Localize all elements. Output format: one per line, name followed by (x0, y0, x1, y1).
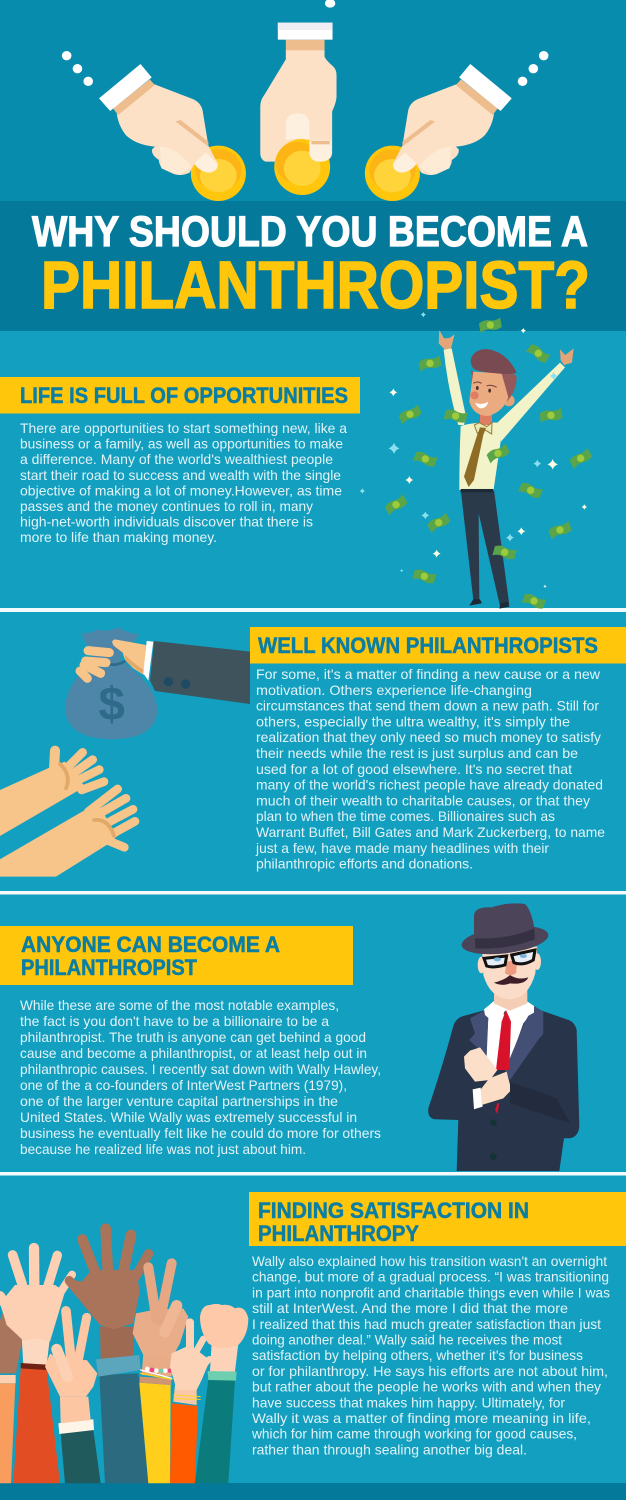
heading bar (0, 926, 353, 985)
heading bar (249, 1192, 626, 1246)
panel: well known philanthropists (0, 627, 626, 877)
blue sleeve arm with dark hand (65, 1229, 149, 1483)
text block: many of the world's richest people have already donated (256, 778, 603, 793)
text block: Warrant Buffet, Bill Gates and Mark Zuckerberg, to name (256, 825, 605, 840)
text block: circumstances that send them down a new path. Still for (256, 699, 599, 714)
giving hand (80, 639, 190, 689)
heading bar (250, 627, 626, 664)
panel: life is full of opportunities (0, 312, 593, 610)
text block: cause and become a philanthropist, or at least help out in (20, 1046, 367, 1061)
text block: doing another deal.” Wally said he receives the most (252, 1332, 562, 1348)
money bag: $ (98, 678, 125, 731)
orange sleeve arm with small peace hand (170, 1322, 210, 1483)
text block: just a few, have made many headlines with their (255, 841, 549, 856)
text block: high-net-worth individuals discover that there is (20, 515, 313, 530)
heading bar: WELL KNOWN PHILANTHROPISTS (258, 633, 598, 658)
heading bar: ANYONE CAN BECOME A (21, 932, 280, 957)
text block: more to life than making money. (20, 530, 217, 545)
text block: or for philanthropy. He says his efforts are not about him, (252, 1364, 608, 1379)
text block: because he realized life was not just about him. (20, 1142, 306, 1157)
text block: change, but more of a gradual process. “I was transitioning (252, 1270, 609, 1285)
hat (460, 903, 550, 959)
text block: philanthropic efforts and donations. (256, 857, 473, 872)
sparkles (360, 312, 587, 588)
far left arm (0, 1290, 22, 1483)
text block (255, 667, 605, 872)
text block: United States. While Wally was extremely successful in (20, 1110, 357, 1125)
text block (20, 998, 381, 1157)
illustration: hands dropping coins (62, 0, 549, 201)
text block: one of the larger venture capital partnerships in the (20, 1094, 338, 1109)
text block: their needs while the rest is just surplus and can be (256, 746, 578, 761)
text block: still at InterWest. And the more I did that the more (252, 1301, 568, 1316)
red sleeve arm with open hand (0, 1248, 72, 1483)
text block: which for him came through working for good causes, (251, 1427, 577, 1442)
heading bar (0, 377, 360, 414)
text block: much of their wealth to charitable causes, or that they (256, 793, 590, 808)
text block (20, 421, 347, 545)
text block: one of the a co-founders of InterWest Partners (1979), (20, 1078, 347, 1093)
illustration: man with hat and glasses (428, 903, 579, 1171)
text block: plan to when the time comes. Billionaires such as (256, 809, 555, 824)
right hand and coin (365, 64, 512, 201)
text block: Wally it was a matter of finding more meaning in life, (252, 1411, 591, 1426)
falling bills (384, 318, 593, 610)
buttons (490, 1119, 497, 1160)
panel: anyone can become a philanthropist (0, 903, 579, 1171)
text block: objective of making a lot of money.However, as time (20, 483, 342, 498)
heading bar: LIFE IS FULL OF OPPORTUNITIES (20, 383, 348, 408)
upper reaching hand (0, 751, 104, 836)
illustration: raised hands (0, 1229, 248, 1483)
text block: business or a family, as well as opportunities to make (20, 437, 343, 452)
text block: in part into nonprofit and charitable things even while I was (252, 1285, 610, 1300)
lower reaching hand (0, 789, 135, 877)
bills over man (444, 372, 558, 561)
text block: realization that they only need so much money to satisfy (256, 730, 601, 745)
illustration: man with money rain (360, 312, 593, 610)
suit arm (150, 641, 250, 704)
text block: used for a lot of good elsewhere. It's no secret that (256, 762, 572, 777)
text block: passes and the money continues to roll in, many (20, 499, 313, 514)
suit (428, 1011, 579, 1171)
text block: start their road to success and wealth with the single (20, 468, 341, 483)
text block (251, 1254, 610, 1457)
text block: I realized that this had much greater satisfaction than just (252, 1317, 601, 1332)
head (478, 947, 541, 1011)
text block: philanthropist. The truth is anyone can get behind a good (20, 1030, 366, 1045)
coin dots (62, 0, 549, 86)
text block: motivation. Others experience life-changing (256, 683, 532, 698)
heading bar: PHILANTHROPIST (21, 955, 198, 980)
center hand and coin (260, 23, 337, 195)
text block: the fact is you don't have to be a billionaire to be a (20, 1014, 329, 1029)
title (32, 208, 590, 323)
text block: others, especially the ultra wealthy, it's simply the (256, 714, 570, 729)
man figure (439, 330, 574, 609)
text block: While these are some of the most notable examples, (20, 998, 339, 1013)
text block: rather than through sealing another big deal. (252, 1442, 527, 1457)
text block: Wally also explained how his transition wasn't an overnight (252, 1254, 607, 1269)
heading bar: FINDING SATISFACTION IN (258, 1198, 529, 1223)
text block: have success that makes him happy. Ultimately, for (252, 1395, 565, 1410)
text block: satisfaction by helping others, whether it's for business (252, 1348, 583, 1363)
text block: philanthropic causes. I recently sat down with Wally Hawley, (20, 1062, 381, 1077)
dark green sleeve arm with peace hand (45, 1311, 101, 1483)
panel: finding satisfaction in philanthropy (0, 1192, 626, 1483)
crossed hands (464, 1047, 570, 1123)
yellow sleeve arm with peace hand (133, 1263, 188, 1483)
left hand and coin (99, 64, 246, 201)
text block: For some, it's a matter of finding a new cause or a new (256, 667, 600, 682)
shirt and lapels (469, 1001, 543, 1114)
text block: a difference. Many of the world's wealthiest people (20, 452, 333, 467)
teal sleeve arm with fist (195, 1304, 248, 1483)
money bag (65, 627, 157, 739)
text block: business he eventually felt like he could do more for others (20, 1126, 381, 1141)
text block: There are opportunities to start something new, like a (20, 421, 347, 436)
text block: but rather about the people he works with and when they (252, 1380, 601, 1395)
illustration: money bag and reaching hands (0, 627, 250, 877)
heading bar: PHILANTHROPY (258, 1221, 419, 1246)
